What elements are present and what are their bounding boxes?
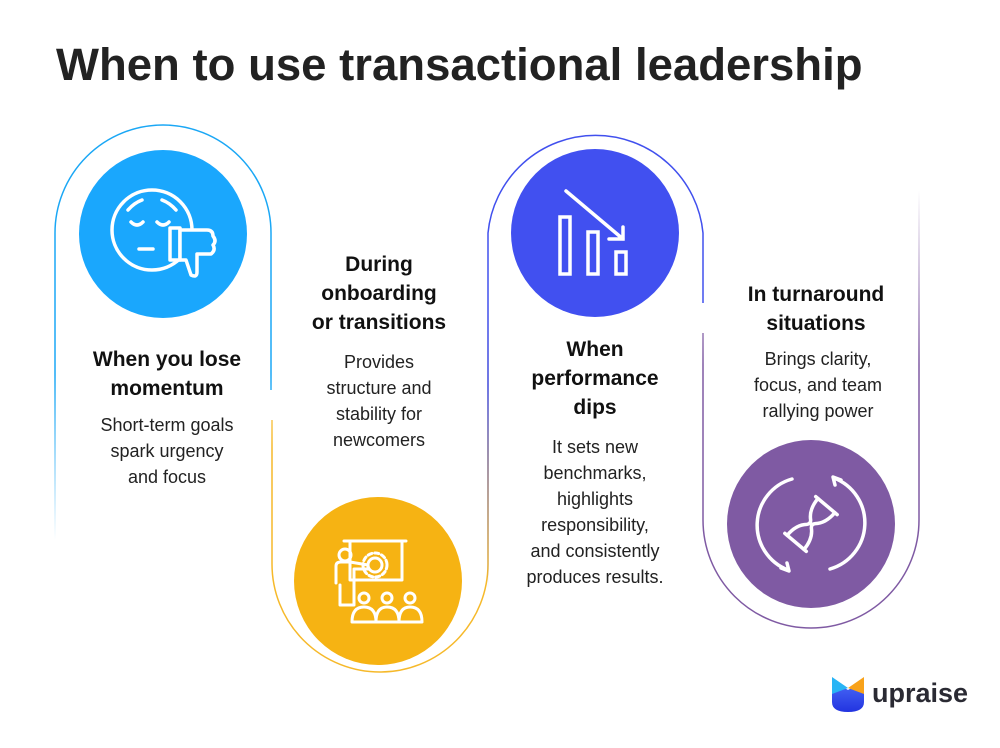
heading: During [345, 253, 413, 276]
panel: performance dips [488, 135, 703, 590]
heading: onboarding [321, 282, 437, 305]
heading: When [566, 338, 624, 361]
heading: dips [573, 396, 617, 419]
panel: turnaround [703, 190, 919, 628]
body text: structure and [326, 378, 432, 398]
heading: In turnaround [748, 283, 884, 306]
body text: Short-term goals [100, 415, 234, 435]
icon: presentation [294, 497, 462, 665]
body text: and focus [128, 467, 206, 487]
heading: situations [766, 312, 866, 335]
title: When to use transactional leadership [56, 39, 863, 90]
body text: and consistently [530, 541, 660, 561]
heading: or transitions [312, 311, 446, 334]
heading: momentum [110, 377, 224, 400]
body text: spark urgency [110, 441, 224, 461]
logo: upraise: upraise [872, 678, 968, 708]
body text: stability for [336, 404, 422, 424]
body text: benchmarks, [543, 463, 647, 483]
body text: Provides [344, 352, 414, 372]
heading: performance [531, 367, 659, 390]
icon: declining bars [511, 149, 679, 317]
body text: Brings clarity, [765, 349, 871, 369]
body text: rallying power [762, 401, 874, 421]
icon: hourglass cycle [727, 440, 895, 608]
body text: focus, and team [754, 375, 882, 395]
icon: sad face thumbs down [79, 150, 247, 318]
body text: It sets new [552, 437, 639, 457]
body text: responsibility, [541, 515, 649, 535]
heading: When you lose [93, 348, 241, 371]
panel: lose momentum [55, 125, 271, 540]
body text: newcomers [333, 430, 425, 450]
body text: produces results. [526, 567, 664, 587]
panel: onboarding [272, 253, 488, 672]
body text: highlights [557, 489, 633, 509]
logo: upraise [832, 677, 968, 712]
